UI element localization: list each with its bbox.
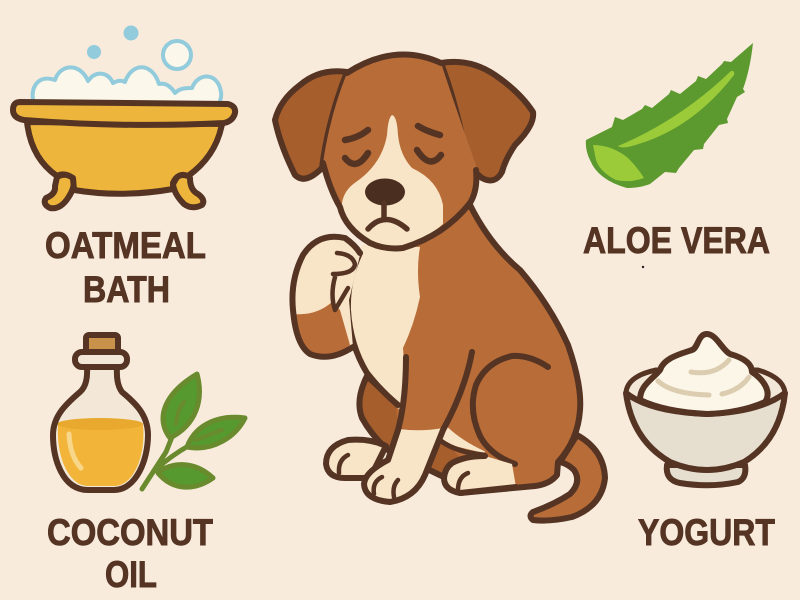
thigh white patch bbox=[442, 428, 484, 452]
left ear bbox=[275, 71, 347, 179]
icon: aloe cut face bbox=[593, 145, 644, 181]
label: aloe vera: ALOE VERA bbox=[583, 220, 770, 261]
icon: collar bbox=[75, 352, 127, 367]
panel: aloe vera bbox=[583, 43, 770, 268]
label: yogurt: YOGURT bbox=[638, 512, 775, 553]
icon: cork bbox=[86, 335, 118, 352]
icon: aloe stripe bbox=[618, 71, 734, 147]
rear haunch behind bbox=[359, 376, 480, 480]
mouth bbox=[368, 203, 407, 229]
panel: oatmeal bath bbox=[13, 26, 235, 310]
icon: bowl foot bbox=[667, 465, 745, 485]
icon: yogurt bowl bbox=[626, 334, 785, 485]
chest bbox=[348, 245, 420, 410]
label: oil: OIL bbox=[105, 554, 157, 595]
haunch line bbox=[473, 356, 548, 464]
front leg bbox=[364, 352, 472, 502]
icon: yogurt swirl bbox=[640, 334, 768, 414]
icon: glass outline bbox=[53, 368, 148, 490]
panel: coconut oil bbox=[47, 335, 245, 595]
head bbox=[323, 55, 476, 248]
nose bbox=[365, 178, 405, 206]
label: bath: BATH bbox=[83, 269, 170, 310]
icon: bubbles bbox=[87, 26, 191, 69]
chest outline bbox=[348, 253, 398, 405]
near hind paw bbox=[444, 456, 516, 493]
icon: bottle bbox=[53, 335, 148, 490]
icon: tub rim bbox=[13, 102, 235, 125]
icon: oil bbox=[58, 419, 143, 486]
raised scratching leg bbox=[292, 237, 360, 357]
icon: bathtub with foam bbox=[13, 26, 235, 208]
right ear bbox=[441, 62, 533, 180]
body outline bbox=[460, 205, 580, 493]
illustration: sad scratching puppy bbox=[275, 55, 605, 521]
label: coconut: COCONUT bbox=[47, 512, 213, 553]
eyebrows bbox=[345, 126, 440, 140]
icon: aloe leaf bbox=[586, 43, 753, 188]
head outline bbox=[323, 55, 476, 248]
icon: leaf sprig bbox=[142, 374, 245, 489]
panel: yogurt bbox=[626, 334, 785, 553]
label: oatmeal bath: OATMEAL bbox=[45, 225, 206, 266]
tail bbox=[530, 435, 605, 521]
icon: bowl back rim bbox=[626, 370, 785, 410]
far hind paw bbox=[326, 440, 386, 478]
body bbox=[360, 205, 580, 488]
icon: tub feet bbox=[45, 174, 203, 208]
icon: glass body bbox=[53, 368, 148, 490]
icon: bowl body bbox=[626, 393, 785, 470]
icon: swirl shading bbox=[658, 360, 749, 395]
belly curve bbox=[441, 441, 484, 455]
closed eyes bbox=[345, 150, 441, 164]
icon: tub bowl bbox=[27, 122, 222, 194]
muzzle blaze bbox=[342, 115, 443, 246]
icon: foam bbox=[33, 67, 221, 106]
